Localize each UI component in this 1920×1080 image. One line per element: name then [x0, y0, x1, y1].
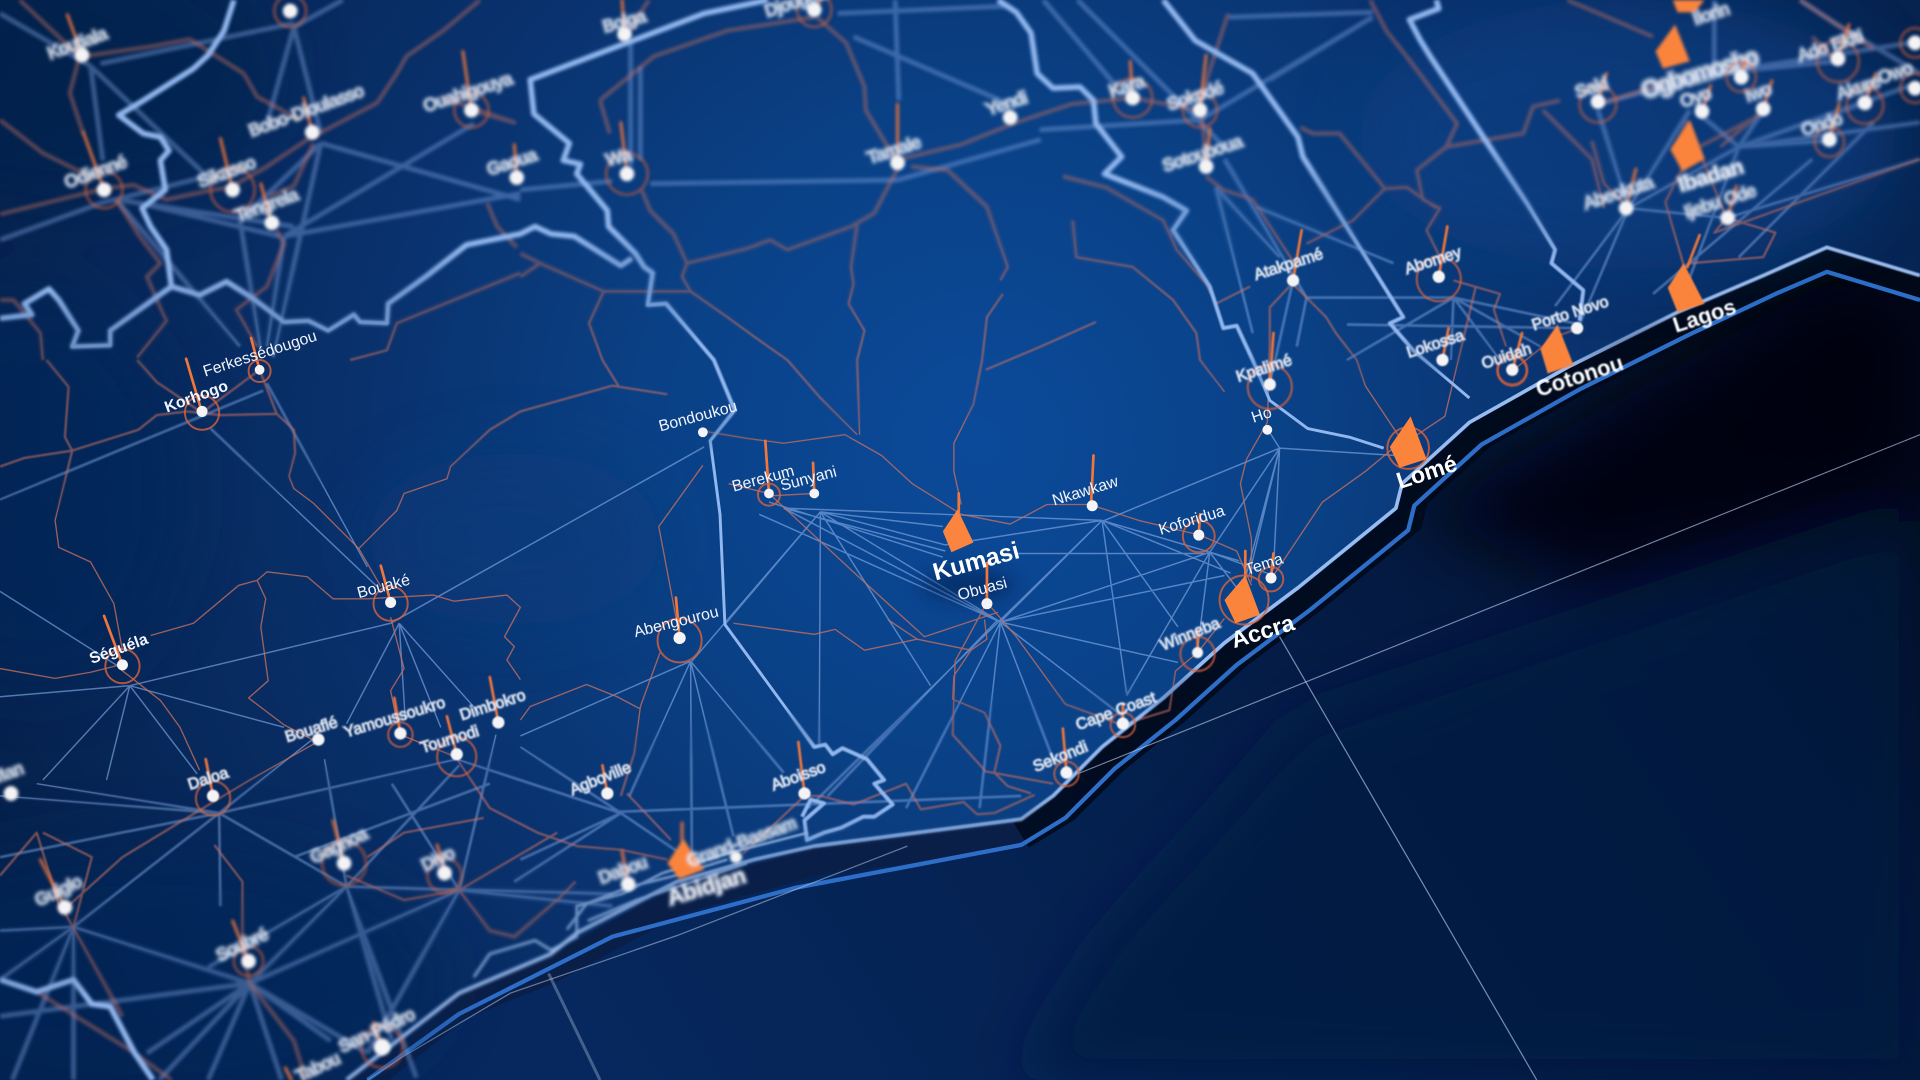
town: Saki: Saki	[1573, 72, 1610, 102]
town: San-Pédro: San-Pédro	[335, 1004, 418, 1056]
town: Ado Ekiti: Ado Ekiti	[1795, 26, 1866, 65]
city: Abidjan: Abidjan	[664, 863, 749, 910]
town: Saki	[1573, 72, 1616, 122]
town: Lokossa: Lokossa	[1405, 327, 1467, 362]
town: Kpalimé: Kpalimé	[1234, 352, 1294, 386]
town: Akure: Akure	[1834, 71, 1883, 104]
town: Akure	[1834, 71, 1883, 124]
town: Abengourou: Abengourou	[632, 604, 720, 641]
city: Cotonou: Cotonou	[1533, 350, 1626, 402]
town: Sunyani: Sunyani	[779, 463, 839, 495]
town: Abomey	[1403, 227, 1464, 301]
town: Odienné	[62, 132, 129, 208]
town: Bouaké: Bouaké	[355, 572, 412, 602]
town: Gagnoa: Gagnoa	[307, 823, 371, 867]
town: Bondoukou: Bondoukou	[657, 398, 739, 435]
town: Ijebu Ode: Ijebu Ode	[1682, 180, 1758, 222]
town: Korhogo	[162, 359, 231, 430]
town: Atakpamé: Atakpamé	[1252, 246, 1325, 284]
town: Nkawkaw	[1050, 456, 1121, 511]
town: Ferkessédougou: Ferkessédougou	[201, 328, 319, 381]
town: Abeokuta: Abeokuta	[1581, 172, 1656, 213]
town: Porto Novo: Porto Novo	[1530, 293, 1611, 334]
town: Korhogo: Korhogo	[162, 378, 231, 416]
town: Tamale	[865, 104, 923, 170]
city: Ogbomosho: Ogbomosho	[1639, 44, 1761, 103]
town: Nkawkaw: Nkawkaw	[1050, 473, 1121, 509]
town: Tengrela: Tengrela	[232, 184, 301, 225]
town: Séguéla	[87, 616, 151, 683]
town: Ondo: Ondo	[1799, 108, 1845, 140]
major cities with orange markers	[930, 235, 1739, 671]
town: Tema	[1243, 551, 1285, 591]
town: Obuasi: Obuasi	[956, 575, 1009, 604]
city: Cotonou	[1498, 324, 1626, 402]
town: Cape Coast: Cape Coast	[1074, 689, 1159, 734]
town: Aboisso: Aboisso	[769, 759, 828, 794]
town: Oyo: Oyo	[1678, 83, 1714, 111]
town: Ouidah	[1480, 333, 1534, 386]
town: Grand-Bassam: Grand-Bassam	[684, 812, 799, 871]
town: Winneba: Winneba	[1158, 615, 1223, 654]
town: Koutiala: Koutiala	[45, 23, 110, 63]
city: Abidjan	[664, 823, 749, 910]
town: Ho: Ho	[1249, 404, 1274, 427]
city: Kumasi: Kumasi	[930, 537, 1022, 586]
town: Abomey: Abomey	[1403, 244, 1464, 278]
town: Gaoua: Gaoua	[484, 144, 540, 179]
town: Osogbo: Iwo	[1742, 78, 1774, 106]
out-of-focus northern towns	[45, 0, 1920, 230]
mid-focus towns	[186, 227, 1611, 816]
town: Sekondi: Sekondi	[1031, 738, 1090, 776]
town: Sikasso: Sikasso	[195, 152, 258, 191]
in-focus towns	[87, 328, 1285, 683]
town: Atakpamé	[1252, 230, 1325, 287]
town: Tamale: Tamale	[865, 131, 923, 168]
city: Ibadan	[1670, 120, 1746, 197]
town: Sokodé: Sokodé	[1164, 77, 1226, 114]
city: Kumasi	[930, 493, 1022, 586]
town: Gagnoa	[307, 820, 371, 885]
town: Sotouboua: Sotouboua	[1160, 131, 1245, 175]
city: Ibadan: Ibadan	[1675, 155, 1746, 197]
out-of-focus southern towns	[0, 758, 799, 1080]
town: Agboville: Agboville	[567, 759, 634, 799]
town: Ouagadougou	[421, 51, 515, 127]
town: Sikasso	[195, 138, 258, 212]
city: Accra	[1220, 551, 1298, 653]
town: Offa	[1727, 61, 1756, 92]
town: Nikki	[274, 0, 306, 27]
town: Odienné: Odienné	[62, 151, 129, 192]
town: Toumodi	[419, 716, 481, 776]
town: Ouidah: Ouidah	[1480, 341, 1534, 373]
shadow under Kumasi label	[921, 569, 1014, 601]
town: Ado Ekiti	[1795, 24, 1866, 82]
town: Divo: Divo	[418, 842, 458, 875]
town: Dabou: Dabou	[596, 852, 650, 888]
town: Yendi: Yendi	[983, 87, 1030, 119]
town: Benin edge: Owo	[1875, 57, 1915, 87]
town: Ouagadougou: Ouahigouya	[421, 68, 515, 116]
town: Kpalimé	[1234, 333, 1294, 409]
town: Soubré: Soubré	[213, 924, 271, 965]
town: Dapaong	[1106, 61, 1152, 118]
town: Wa	[604, 122, 648, 195]
town: Banfora: Bobo-Dioulasso	[246, 80, 366, 140]
town: Benin edge	[1875, 28, 1920, 103]
town: Daloa	[186, 759, 231, 816]
town: Berekum: Berekum	[730, 463, 796, 496]
town: Bouaflé: Bouaflé	[283, 714, 340, 746]
town: Yamoussoukro: Yamoussoukro	[342, 694, 448, 741]
town: Dimbokro: Dimbokro	[458, 687, 528, 724]
town: Winneba	[1158, 615, 1223, 671]
town: Sokodé	[1164, 55, 1226, 127]
town: Koforidua: Koforidua	[1157, 503, 1227, 539]
town: Séguéla: Séguéla	[87, 631, 151, 668]
city: Lagos	[1668, 235, 1739, 338]
city: Accra: Accra	[1228, 609, 1298, 653]
ocean survey lines	[549, 435, 1920, 1080]
town: Sekondi	[1031, 729, 1090, 786]
town: Toumodi: Toumodi	[419, 723, 481, 757]
town: Guiglo: Guiglo	[32, 871, 85, 910]
seabed shelf shading	[1016, 282, 1920, 1080]
town: Ondo	[1799, 104, 1845, 157]
town: Tema: Tema	[1243, 551, 1285, 579]
town: Wa: Wa	[604, 144, 634, 170]
town: Dapaong: Kara	[1106, 71, 1147, 101]
town: Abengourou	[632, 598, 720, 662]
town: Bolgatanga: Bolga	[600, 6, 648, 36]
city: Lomé: Lomé	[1393, 450, 1460, 494]
town: Obuasi	[956, 563, 1009, 609]
town: Daloa: Daloa	[186, 765, 231, 794]
city: Lomé	[1387, 416, 1460, 494]
coastal shadow and shelf lip	[355, 260, 1920, 1080]
city: Lagos: Lagos	[1670, 294, 1739, 338]
town: Berekum	[730, 441, 796, 506]
town: Bouaké	[355, 566, 412, 621]
town: Divo	[418, 842, 462, 893]
town: Aboisso	[769, 742, 828, 800]
